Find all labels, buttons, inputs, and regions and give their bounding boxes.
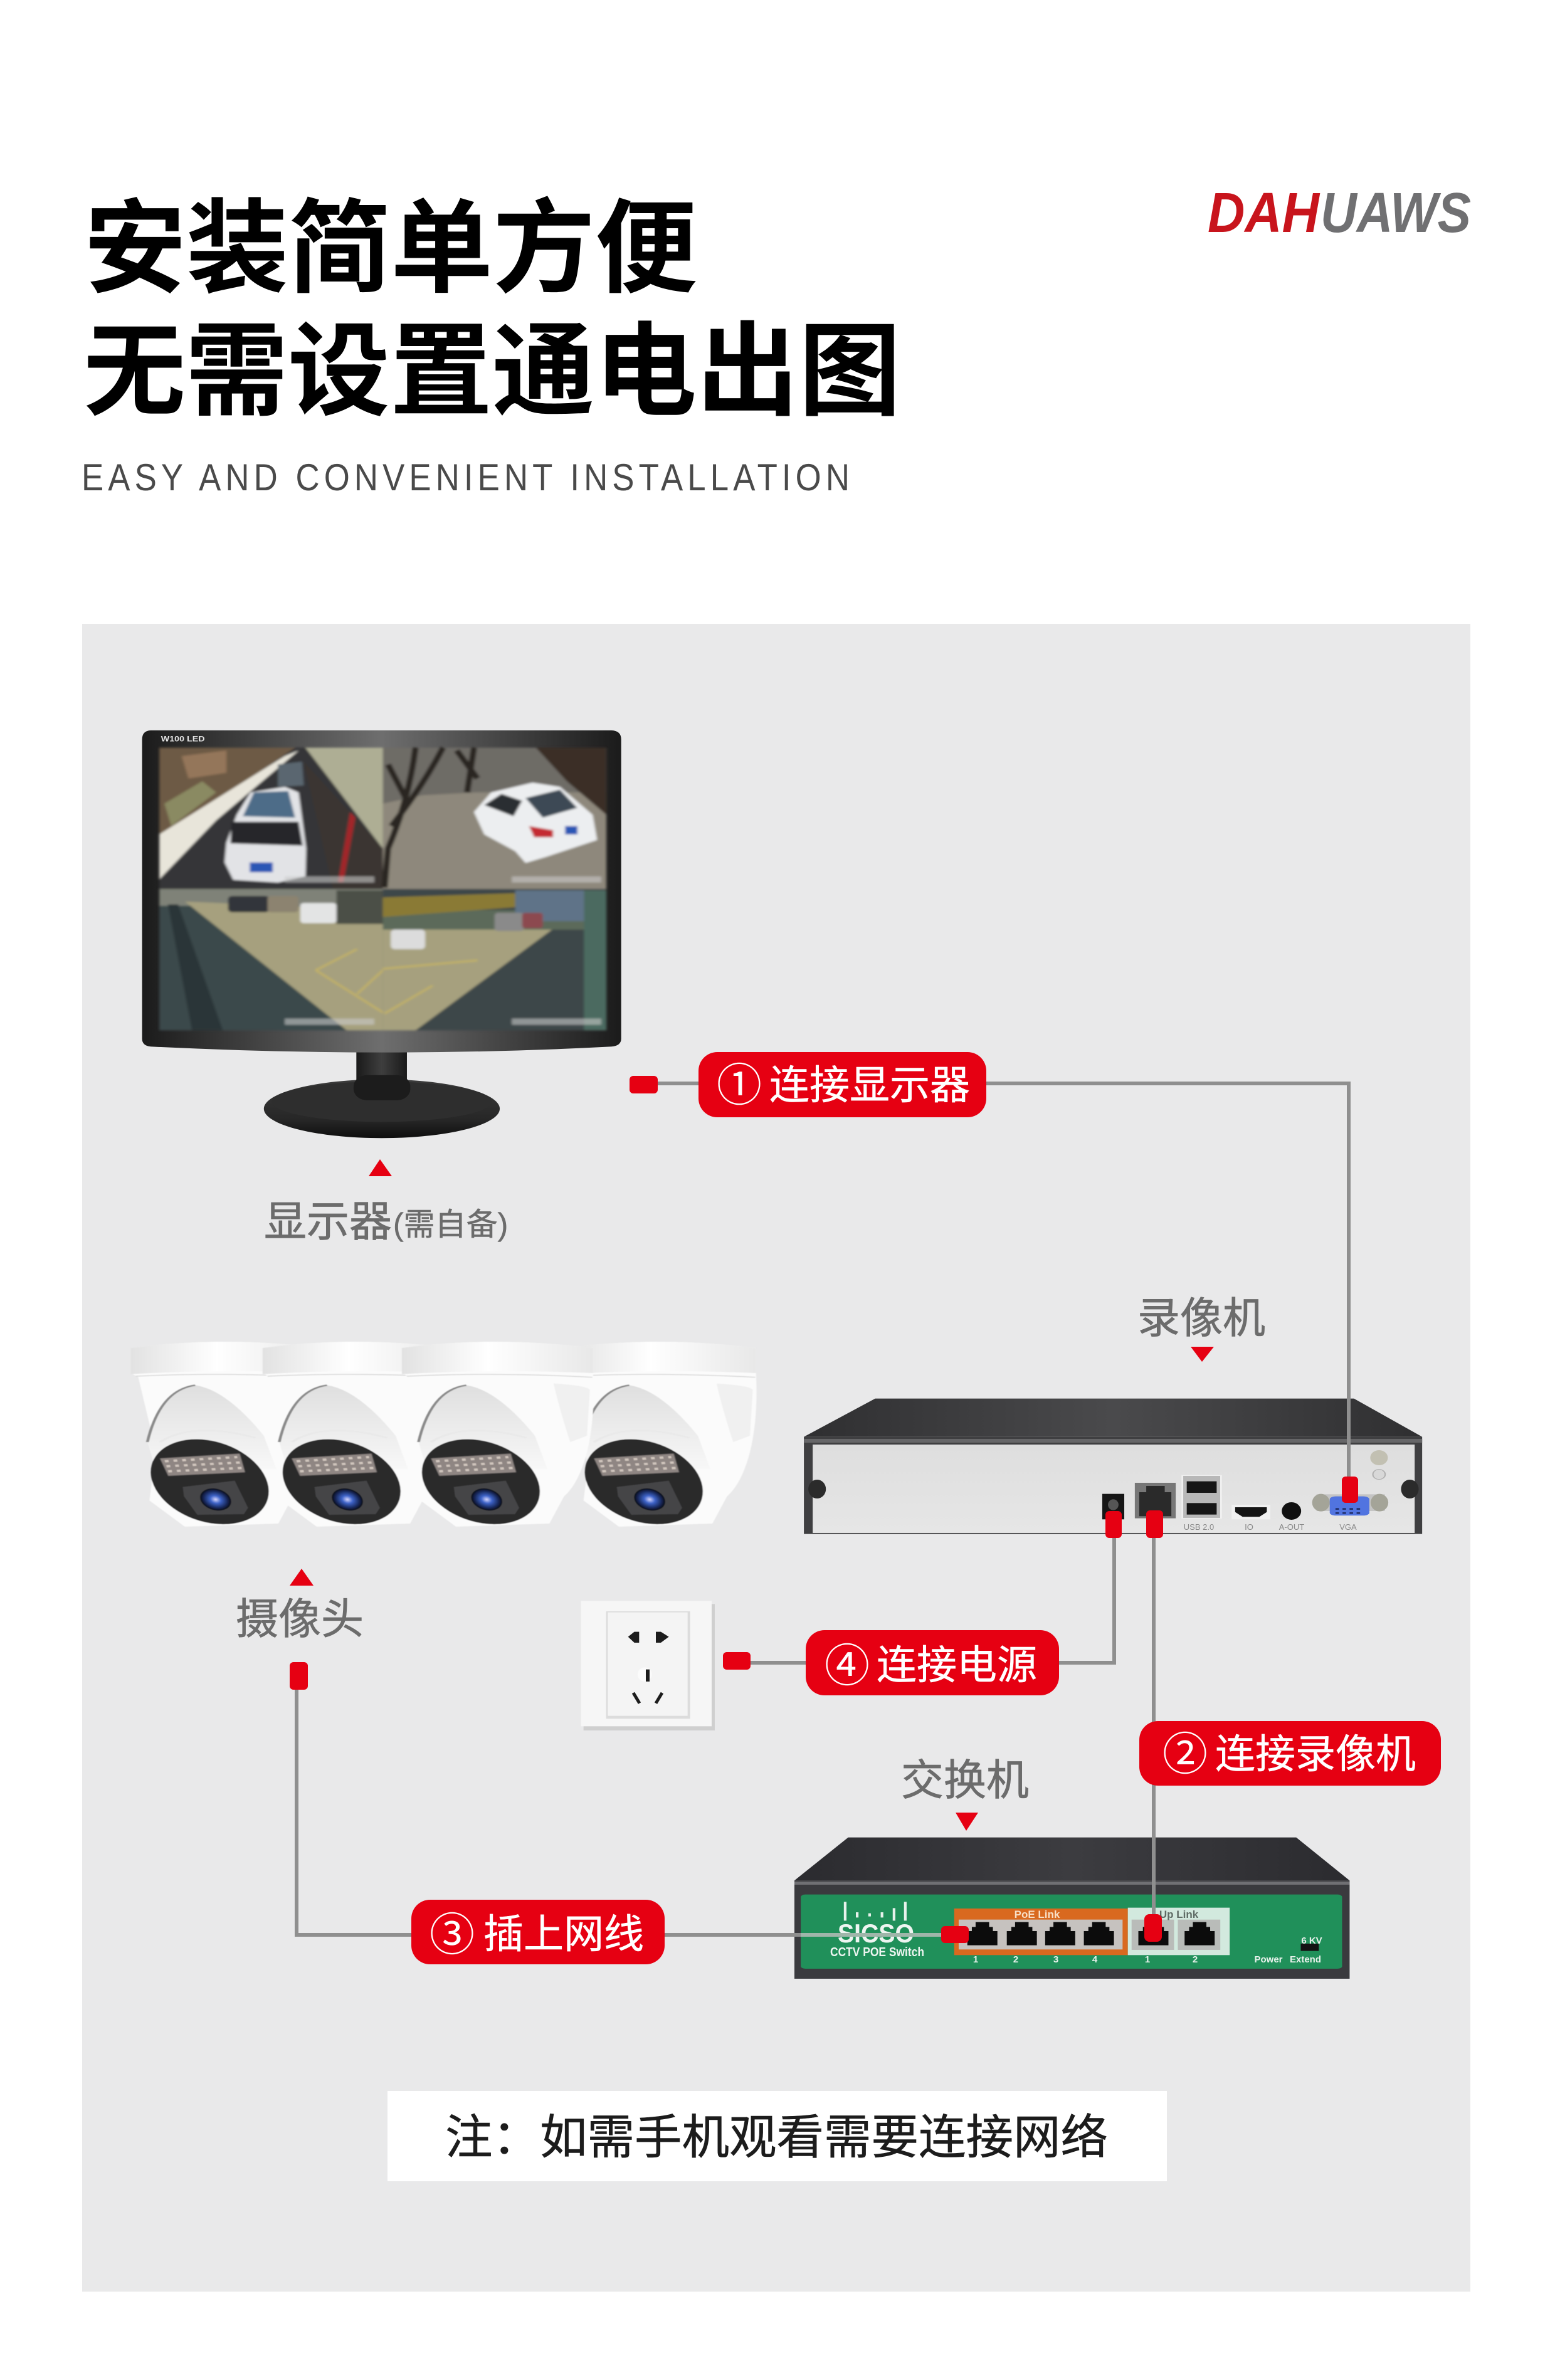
callout: step 1 connect monitor: 连接显示器 [769,1063,970,1108]
callout: step 4 connect power [806,1630,1059,1695]
monitor [142,730,621,1138]
switch brand text: SICSO [838,1919,914,1948]
callout: step 3 plug in network cable: ③ [430,1910,475,1961]
NVR port labels: IO [1245,1522,1253,1532]
NVR port labels: A-OUT [1279,1522,1304,1532]
camera 2 [263,1342,454,1531]
callout: step 2 connect recorder: ② [1162,1730,1208,1780]
socket holes [628,1632,669,1703]
marker triangle: monitor [369,1159,392,1176]
switch port labels: Extend [1290,1954,1321,1965]
NVR USB ports [1183,1475,1221,1519]
callout: step 4 connect power: 连接电源 [877,1643,1037,1688]
callout: step 2 connect recorder: 连接录像机 [1215,1732,1416,1777]
monitor stand [264,1051,500,1138]
camera 3 [402,1342,594,1531]
switch body [794,1880,1349,1979]
label: monitor: 显示器 [264,1198,392,1246]
label: cameras: 摄像头 [236,1596,364,1643]
switch port labels: Up Link [1159,1909,1199,1920]
brand logo [1208,182,1471,245]
switch brand text: CCTV POE Switch [830,1946,924,1959]
callout: step 1 connect monitor [698,1052,986,1117]
switch top cover [794,1838,1349,1880]
cameras [131,1342,757,1531]
NVR ethernet port [1135,1483,1176,1519]
switch brand text [830,1919,924,1959]
power socket [581,1601,715,1730]
marker triangle: cameras [290,1569,314,1586]
label: monitor: (需自备) [393,1207,508,1242]
monitor brand text: W100 LED [161,735,205,743]
camera 4 [565,1342,757,1531]
note box [387,2091,1167,2181]
feed: bottom right lot [383,889,606,1030]
label: recorder: 录像机 [1137,1295,1265,1342]
connection lines [297,1083,1349,1935]
panel: wiring diagram background [82,624,1470,2292]
callout: step 4 connect power: ④ [825,1641,870,1692]
recorder NVR [804,1399,1422,1534]
feed: bottom left lot [159,889,384,1030]
camera 1 [131,1342,322,1531]
callout: step 2 connect recorder [1139,1721,1441,1786]
note box: 注：如需手机观看需要连接网络 [445,2111,1108,2164]
NVR port labels: VGA [1339,1522,1357,1532]
switch port labels: Power [1254,1954,1283,1965]
feed: top right car [383,747,606,889]
NVR body [804,1437,1422,1534]
switch port labels: PoE Link [1015,1909,1060,1920]
brand logo: UAWS [1320,182,1471,245]
callout: step 3 plug in network cable [411,1900,665,1964]
title [83,191,901,429]
NVR audio out [1282,1502,1301,1520]
switch port labels: 2 [1193,1954,1198,1965]
switch port labels [973,1909,1322,1965]
switch port labels: 4 [1092,1954,1098,1965]
switch brand bars [845,1902,905,1920]
brand logo: DAH [1208,182,1320,245]
NVR VGA port [1312,1494,1388,1515]
PoE port group [954,1909,1128,1955]
PoE switch [794,1838,1349,1979]
feed: top left street [159,747,383,889]
NVR HDMI port [1231,1505,1270,1519]
monitor bezel [142,730,621,1053]
callout: step 1 connect monitor: ① [717,1061,762,1111]
switch port labels: 1 [1145,1954,1150,1965]
NVR port labels: USB 2.0 [1184,1522,1214,1532]
marker triangle: switch [956,1813,978,1831]
uplink port group [1128,1908,1230,1955]
label: monitor [264,1198,508,1246]
red connector markers [290,1076,1358,1943]
camera feed screen [159,747,606,1030]
NVR port labels [1184,1522,1357,1532]
title: 安装简单方便 [84,191,697,306]
switch port labels: 2 [1013,1954,1018,1965]
title: 无需设置通电出图 [83,314,901,429]
label: switch: 交换机 [901,1757,1029,1804]
switch port labels: 3 [1053,1954,1058,1965]
NVR power jack [1102,1494,1124,1519]
switch indicator [1301,1944,1319,1951]
switch port labels: 1 [973,1954,978,1965]
NVR top cover [804,1399,1422,1437]
marker triangle: recorder [1191,1347,1214,1362]
switch port labels: 6 KV [1301,1935,1322,1946]
subtitle: english: EASY AND CONVENIENT INSTALLATION [82,456,850,498]
callout: step 3 plug in network cable: 插上网线 [483,1912,644,1957]
